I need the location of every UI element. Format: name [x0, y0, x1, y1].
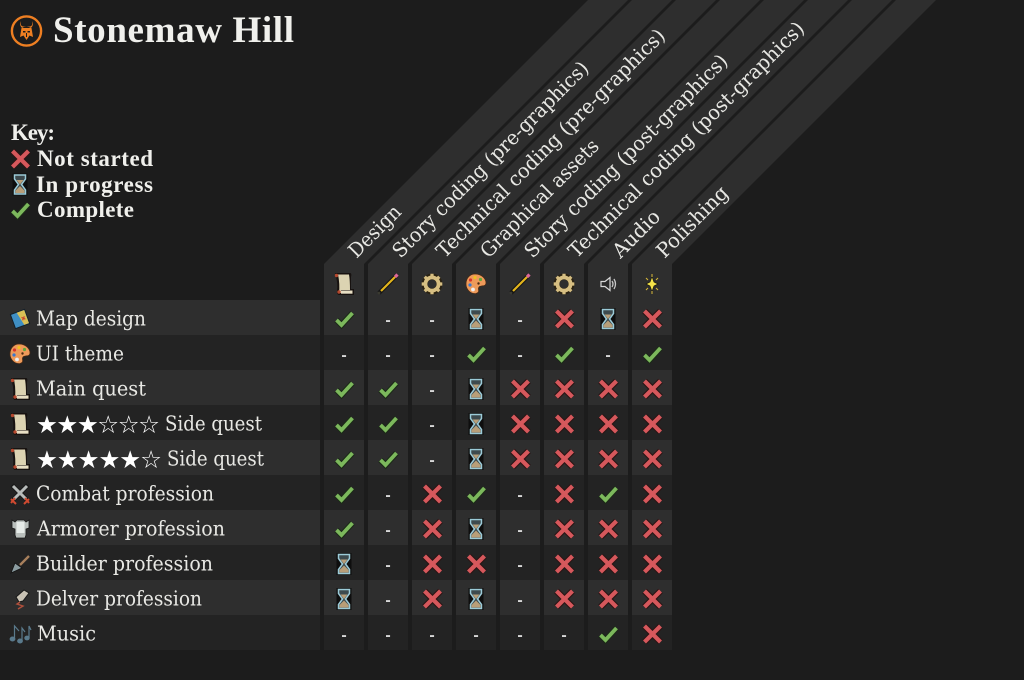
- row: 3 star side quest: [11, 410, 661, 439]
- key / legend: Key:: [11, 120, 55, 145]
- row: Armorer profession: [12, 516, 660, 540]
- row: Main quest: Main quest: [36, 376, 147, 400]
- row: Music: -: [429, 627, 435, 644]
- row: Main quest: [11, 376, 661, 400]
- row: Combat profession: -: [385, 487, 391, 504]
- row: Builder profession: Builder profession: [36, 552, 213, 576]
- row: 3 star side quest: -: [429, 417, 435, 434]
- column header: Technical coding (post-graphics): Technical coding (post-graphics): [563, 16, 809, 263]
- column header: Graphical assets: Graphical assets: [475, 134, 604, 263]
- column header: Polishing: [632, 0, 936, 650]
- column header: Story coding (post-graphics): Story coding (post-graphics): [519, 49, 733, 263]
- column header: Design: Design: [343, 200, 406, 263]
- row: 5 star side quest: Side quest: [167, 446, 265, 470]
- icon: map: [10, 309, 30, 329]
- column header: Audio: Audio: [606, 205, 665, 263]
- row: Armorer profession: Armorer profession: [36, 516, 225, 540]
- column header: Technical coding (pre-graphics): [412, 0, 716, 650]
- row: Map design: [10, 306, 661, 330]
- row: Armorer profession: -: [517, 522, 523, 539]
- row: Main quest: -: [429, 382, 435, 399]
- row: Music: -: [473, 627, 479, 644]
- row: Builder profession: -: [385, 557, 391, 574]
- row: UI theme: [10, 342, 660, 366]
- icon: helmet logo: [12, 16, 41, 46]
- row: Map design: -: [517, 312, 523, 329]
- row: Map design: -: [429, 312, 435, 329]
- row: 5 star side quest: -: [429, 452, 435, 469]
- row: UI theme: -: [429, 347, 435, 364]
- icon: trowel: [11, 556, 29, 573]
- row: Map design: Map design: [36, 306, 146, 330]
- row: Builder profession: [11, 552, 660, 576]
- icon: crossed swords: [11, 485, 29, 504]
- key / legend: [11, 120, 153, 222]
- row: Delver profession: -: [517, 592, 523, 609]
- legend: in progress: In progress: [36, 172, 153, 197]
- row: Combat profession: [11, 482, 660, 506]
- row: 5 star side quest: ★★★★★☆: [36, 445, 162, 474]
- row: Combat profession: Combat profession: [36, 482, 214, 506]
- row: Music: -: [385, 627, 391, 644]
- icon: glove with rope: [16, 590, 29, 609]
- legend: not started: Not started: [37, 146, 153, 171]
- row: UI theme: -: [385, 347, 391, 364]
- row: UI theme: -: [605, 347, 611, 364]
- column header: Design: [324, 0, 628, 650]
- row: Music: Music: [37, 622, 96, 646]
- column header: Story coding (pre-graphics): [368, 0, 672, 650]
- icon: armor: [12, 520, 29, 538]
- column header: Technical coding (post-graphics): [544, 0, 848, 650]
- row: 3 star side quest: Side quest: [165, 412, 263, 436]
- row: Delver profession: -: [385, 592, 391, 609]
- row: 3 star side quest: ★★★☆☆☆: [36, 410, 160, 439]
- row: Music: -: [341, 627, 347, 644]
- column header: Technical coding (pre-graphics): Technical coding (pre-graphics): [431, 24, 670, 263]
- column header: Audio: [588, 0, 892, 650]
- row: Builder profession: -: [517, 557, 523, 574]
- legend: complete: Complete: [37, 197, 134, 222]
- row: Armorer profession: -: [385, 522, 391, 539]
- row: UI theme: -: [341, 347, 347, 364]
- column header: Polishing: Polishing: [651, 180, 733, 263]
- row: Combat profession: -: [517, 487, 523, 504]
- row: UI theme: -: [517, 347, 523, 364]
- column header: Graphical assets: [456, 0, 760, 650]
- column header: Story coding (post-graphics): [500, 0, 804, 650]
- row: Delver profession: [16, 586, 660, 610]
- title: Stonemaw Hill: [53, 10, 294, 51]
- row: 5 star side quest: [11, 445, 661, 474]
- row: Map design: -: [385, 312, 391, 329]
- row: Music: [10, 622, 661, 646]
- column header: Story coding (pre-graphics): Story coding (pre-graphics): [387, 56, 594, 263]
- icon: music notes: [10, 626, 31, 643]
- row: Music: -: [561, 627, 567, 644]
- row: UI theme: UI theme: [36, 342, 124, 366]
- row: Music: -: [517, 627, 523, 644]
- row: Delver profession: Delver profession: [36, 586, 202, 610]
